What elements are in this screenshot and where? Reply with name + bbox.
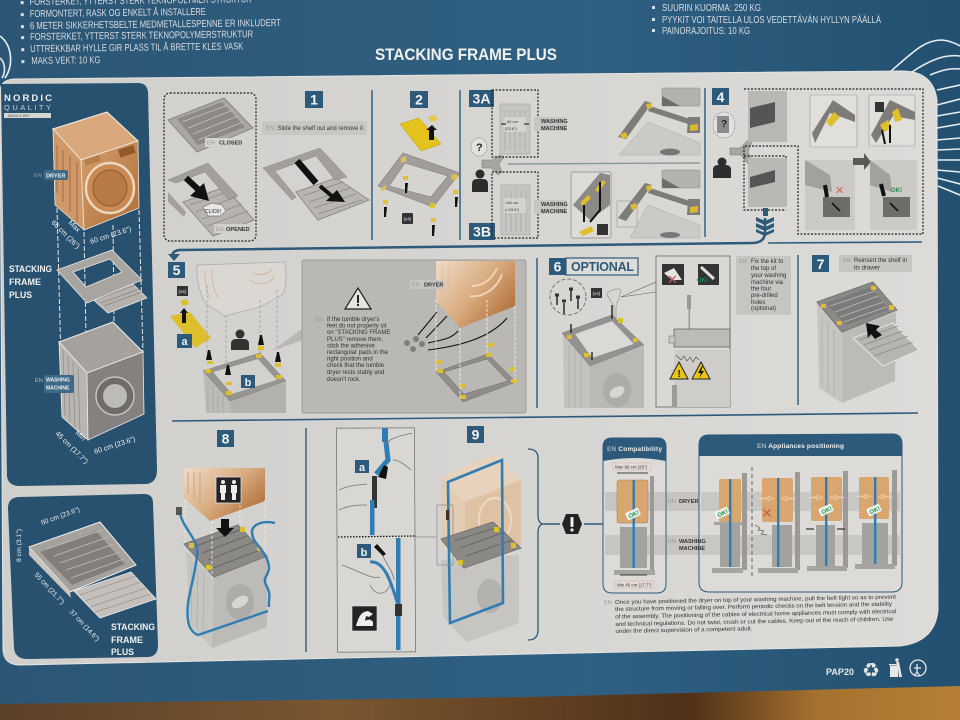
label: frame name [111, 622, 155, 657]
Finnish feature list: SUURIN KUORMA: 250 KG [662, 3, 761, 14]
screwdriver hand [607, 289, 621, 318]
dimension: dryer: 66 cm (26") [50, 218, 82, 251]
person and thought [713, 112, 735, 178]
text: fix kit [736, 256, 791, 315]
safety paragraph: Once you have positioned the dryer on top of your washing machine, pull the belt tight so as to prevent [615, 595, 896, 606]
comparison bands [605, 492, 897, 555]
icon: recycle: ♻ [862, 658, 880, 682]
arrow [866, 323, 882, 339]
feet [404, 336, 425, 352]
person [231, 330, 249, 350]
Norwegian feature list [21, 0, 281, 67]
step 1 [164, 91, 369, 241]
arrows [418, 312, 507, 350]
frame with pads [378, 153, 460, 236]
figure 4 [855, 470, 897, 569]
label: max [613, 463, 651, 470]
label opened: OPENED [226, 227, 250, 233]
screwdriver [687, 295, 691, 339]
label: dryer: EN [34, 173, 42, 179]
number badges 3A 3B [469, 90, 495, 240]
panel view lower [748, 158, 787, 207]
label dryer [410, 280, 444, 289]
warning icons: ! [678, 369, 681, 380]
dryer [53, 112, 139, 230]
dimension: dryer [50, 218, 132, 251]
stack figure: OK! [628, 510, 640, 520]
connection line [415, 536, 437, 538]
number badge 7 [812, 255, 829, 272]
dimensions: 8 cm (3.1") [16, 529, 23, 562]
warning text: on "STACKING FRAME [327, 330, 390, 336]
click burst: CLICK! [205, 209, 221, 215]
dashed box: closed and opened [164, 93, 256, 241]
title: STACKING FRAME PLUS [375, 45, 557, 64]
brand logo: QUALITY [4, 103, 51, 112]
dimension: washer: Min [74, 428, 88, 443]
person and thought: ? [476, 142, 483, 154]
badge a: a [181, 336, 188, 348]
step 2 [378, 91, 460, 236]
stacked appliances with belt [437, 453, 521, 642]
dryer [184, 468, 265, 521]
dryer [436, 261, 515, 328]
yellow pads [400, 115, 441, 151]
warning text: feet do not properly sit [327, 324, 387, 330]
icon right [697, 264, 719, 285]
detail right [869, 95, 917, 230]
connector line [544, 523, 603, 525]
text: fix kit: machine via [751, 280, 784, 286]
step 4 [712, 88, 923, 236]
step 9 [336, 426, 521, 652]
washer with frame [817, 282, 919, 403]
number badge 8 [217, 430, 234, 447]
figure 1 [712, 473, 747, 573]
detail wrong [805, 95, 857, 230]
dimension: washer: 60 cm (23.6") [93, 434, 136, 456]
arrow [216, 519, 234, 537]
dimension: washer [54, 428, 136, 466]
dividers [172, 88, 922, 652]
figure 3 [806, 471, 848, 571]
figure 2: ✕ [761, 505, 773, 521]
dimensions: 55 cm (21.7") [33, 572, 65, 606]
panel: appliance dimensions [1, 83, 157, 486]
safety paragraph [604, 595, 897, 635]
washer variant A: 60 cm [507, 119, 519, 124]
text: slide shelf: EN: Slide the shelf out and remove it [266, 126, 363, 132]
dashed outline [744, 89, 923, 234]
icon: exclamation [562, 514, 582, 534]
labels between panels: MACHINE [679, 546, 705, 552]
open frame illustration [29, 522, 156, 618]
click burst [203, 203, 226, 216]
labels between panels: EN [668, 539, 676, 545]
text: fix kit: Fix the kit to [751, 259, 784, 265]
step 7 [812, 255, 919, 403]
warning text: dryer rests stably and [327, 370, 384, 376]
label: washing machine: EN [35, 378, 43, 384]
badge b [357, 544, 371, 559]
number badge 6 optional: 6 [554, 258, 562, 274]
panel: compatibility [603, 438, 666, 593]
label: dryer: DRYER [46, 174, 65, 180]
safety paragraph: EN [604, 600, 612, 606]
text: fix kit: your washing [751, 273, 786, 279]
badge a [355, 460, 369, 474]
bracket [528, 449, 544, 640]
warning text: right position and [327, 356, 373, 362]
label: min [615, 581, 654, 588]
recycling mark: PAP20 [826, 667, 854, 677]
connector [730, 140, 752, 164]
label: min: Min 45 cm (17.7") [617, 582, 652, 588]
number badge 6 optional [549, 258, 638, 275]
panel: frame dimensions [8, 494, 158, 659]
safety belt [179, 510, 275, 635]
detail 3B [617, 170, 700, 238]
label dryer: EN [412, 282, 420, 288]
number badge 6 optional: OPTIONAL [571, 260, 634, 274]
person and thought: ? [721, 119, 727, 130]
label: frame name: PLUS [111, 647, 134, 657]
detail right: OK! [891, 188, 902, 194]
text: reinsert shelf [839, 255, 912, 272]
belt b [342, 538, 402, 650]
label: washing machine B: MACHINE [541, 209, 567, 215]
screws [550, 279, 586, 315]
text: slide shelf [262, 121, 367, 135]
warning text: PLUS" remove them, [327, 337, 383, 343]
washer variant B: (>23.8") [505, 207, 520, 212]
detail 3A [618, 88, 700, 156]
labels between panels: WASHING [679, 539, 706, 545]
label: washing machine: MACHINE [46, 386, 70, 392]
number badge 5 [168, 262, 185, 278]
number badge 4 [712, 88, 729, 105]
step 3 [469, 88, 700, 240]
label: frame name: STACKING [111, 622, 155, 632]
panel view upper [748, 91, 787, 142]
number badge 1: 1 [310, 92, 318, 108]
divider [338, 536, 415, 537]
label: max: Max 66 cm (26") [615, 464, 648, 470]
detail 3B insert [571, 172, 611, 238]
number badge 7: 7 [817, 256, 825, 272]
figure 1: OK! [717, 509, 729, 519]
labels between panels: EN [668, 499, 676, 505]
washer variant A [492, 90, 538, 157]
text: reinsert shelf: EN [843, 258, 851, 264]
number badge 8: 8 [222, 430, 230, 446]
icon right: OK! [697, 278, 708, 284]
quantity tag: (x4) [178, 289, 187, 294]
yellow pads [170, 299, 211, 348]
label: dryer [34, 170, 68, 180]
washer with frame [203, 335, 286, 413]
washer variant B [492, 172, 538, 238]
text: reinsert shelf: its drawer [854, 266, 880, 272]
washer with frame [562, 305, 644, 408]
arrow [297, 161, 345, 202]
label: washing machine A [534, 117, 568, 132]
label opened: EN [216, 227, 224, 233]
Norwegian feature list: FORSTERKET, YTTERST STERK TEKNOPOLYMERSTRUKTUR [30, 29, 253, 43]
warning triangle [345, 288, 371, 309]
warning icons [670, 362, 710, 380]
step 6 [549, 256, 791, 408]
icon: tidyman [910, 660, 926, 676]
label: washing machine A: WASHING [541, 119, 568, 125]
washer variant A: (23.6") [505, 126, 518, 131]
label dryer: DRYER [424, 282, 443, 288]
Norwegian feature list: 6 METER SIKKERHETSBELTE MEDMETALLESPENNE ER INKLUDERT [30, 18, 281, 32]
label: washing machine B: WASHING [541, 202, 568, 208]
number badge 9 [467, 426, 484, 443]
dimension: washer: 45 cm (17.7") [54, 429, 90, 466]
badge a [177, 334, 192, 348]
number badge 4: 4 [717, 89, 725, 105]
label: washing machine A: MACHINE [541, 126, 567, 132]
warning text: rectangular pads in the [327, 350, 389, 356]
person and thought [471, 138, 488, 192]
arrow [853, 153, 871, 170]
badge a: a [359, 462, 366, 474]
figure 4: OK! [869, 506, 881, 516]
quantity tag: (x4) [592, 291, 601, 296]
dashed separator [751, 467, 753, 578]
figure 2 [755, 472, 800, 573]
label closed [205, 138, 245, 147]
label closed: CLOSED [219, 140, 242, 146]
number badges 3A 3B: 3A [473, 90, 490, 106]
icon: two people [216, 477, 241, 503]
text: fix kit: the top of [751, 266, 776, 272]
washing machine [59, 322, 144, 440]
text: fix kit: (optional) [751, 306, 776, 312]
icon: muscle [352, 606, 377, 631]
badge b: b [361, 547, 368, 559]
Norwegian feature list: FORMONTERT, RASK OG ENKELT Å INSTALLERE [30, 5, 206, 20]
dashed guide lines [57, 208, 143, 440]
dimensions [16, 506, 100, 643]
labels between panels [668, 499, 706, 552]
label: washing machine [35, 375, 74, 393]
Finnish feature list: PAINORAJOITUS: 10 KG [662, 26, 750, 37]
safety paragraph: and technical regulations. Do not twist, crush or cut the cables. Keep out of the reach of children. Use [615, 617, 893, 628]
safety paragraph: under the direct supervision of a competent adult. [615, 626, 753, 635]
quantity tag [177, 286, 188, 296]
icon: bin [889, 658, 902, 677]
opened shelf [168, 163, 254, 236]
labels between panels: DRYER [679, 499, 698, 505]
number badge 2: 2 [415, 92, 423, 108]
quantity tag [402, 213, 413, 224]
number badge 1 [305, 91, 323, 108]
brand logo: NORDIC [4, 93, 52, 104]
icon wrong [662, 264, 684, 287]
number badge 2 [410, 91, 428, 108]
label: washing machine B [534, 200, 568, 215]
label: frame name: PLUS [9, 290, 32, 300]
detail wrong: ✕ [835, 185, 844, 197]
text: fix kit: pre-drilled [751, 293, 778, 299]
badge b: b [245, 377, 252, 389]
safety paragraph: of the assembly. The positioning of the cables of electrical home appliances must comply with electrical [615, 609, 896, 620]
badge b [241, 375, 255, 389]
detail panel [621, 256, 730, 407]
number badge 5: 5 [173, 262, 181, 278]
chevrons [756, 208, 774, 236]
Finnish feature list [652, 3, 881, 37]
icon wrong: ✕ [667, 272, 678, 287]
text: fix kit: holes [751, 300, 765, 306]
Finnish feature list: PYYKIT VOI TAITELLA ULOS VEDETTÄVÄN HYLLYN PÄÄLLÄ [662, 14, 881, 26]
warning text: check that the tumble [327, 363, 385, 369]
stacking frame [57, 250, 147, 313]
connector arrow to step 5 [172, 218, 765, 255]
Norwegian feature list: UTTREKKBAR HYLLE GIR PLASS TIL Å BRETTE KLES VASK [30, 39, 244, 55]
decorative wave lines [0, 36, 960, 195]
belt detail panel [336, 428, 416, 652]
washer variant B: >64 cm [505, 200, 519, 205]
washer with frame [184, 500, 267, 648]
warning text: EN [315, 317, 323, 323]
text: fix kit: EN [739, 259, 747, 265]
frame with shelf [263, 148, 369, 220]
warning text: doesn't rock. [327, 377, 361, 383]
text: reinsert shelf: Reinsert the shelf in [854, 258, 907, 264]
text: fix kit: the four [751, 286, 771, 292]
warning text: stick the adhesive [327, 344, 375, 350]
label: washing machine: WASHING [46, 378, 70, 384]
panel: appliances positioning: EN Appliances positioning [757, 443, 844, 450]
label opened [214, 224, 252, 233]
panel: appliances positioning [699, 434, 902, 592]
figure 3: OK! [821, 506, 833, 516]
stack figure [614, 473, 655, 575]
dimension: dryer: 60 cm (23.6") [89, 224, 132, 246]
quantity tag [591, 288, 602, 298]
label closed: EN [207, 140, 215, 146]
quantity tag: (x4) [404, 216, 412, 222]
dimension: dryer: Max [67, 218, 83, 234]
panel: compatibility: EN Compatibility [607, 446, 662, 453]
closed shelf [168, 98, 253, 152]
label: frame name [9, 264, 52, 300]
connector [482, 155, 504, 175]
frame section [669, 329, 730, 407]
brand logo: WASH & DRY [8, 114, 31, 118]
callout panel [272, 260, 526, 413]
arrow [186, 178, 209, 201]
number badge 9: 9 [472, 426, 480, 442]
brand logo [4, 93, 52, 118]
dimensions: 60 cm (23.6") [40, 506, 81, 527]
belt a [339, 428, 412, 535]
step 8 [176, 430, 275, 648]
thought dryer [197, 262, 286, 380]
label: frame name: FRAME [9, 277, 41, 287]
frame [436, 300, 517, 402]
label: frame name: STACKING [9, 264, 52, 274]
number badges 3A 3B: 3B [473, 224, 491, 240]
dimensions: 37 cm (14.6") [68, 609, 100, 643]
label: frame name: FRAME [111, 635, 143, 645]
warning text [315, 317, 390, 383]
warning text: If the tumble dryer's [327, 317, 380, 323]
Norwegian feature list: MAKS VEKT: 10 KG [31, 55, 101, 67]
recycling mark [826, 658, 926, 682]
step 5 [168, 260, 526, 413]
safety paragraph: the structure from moving or falling over. Perform periodic checks on the belt tension and the stability [615, 602, 892, 613]
